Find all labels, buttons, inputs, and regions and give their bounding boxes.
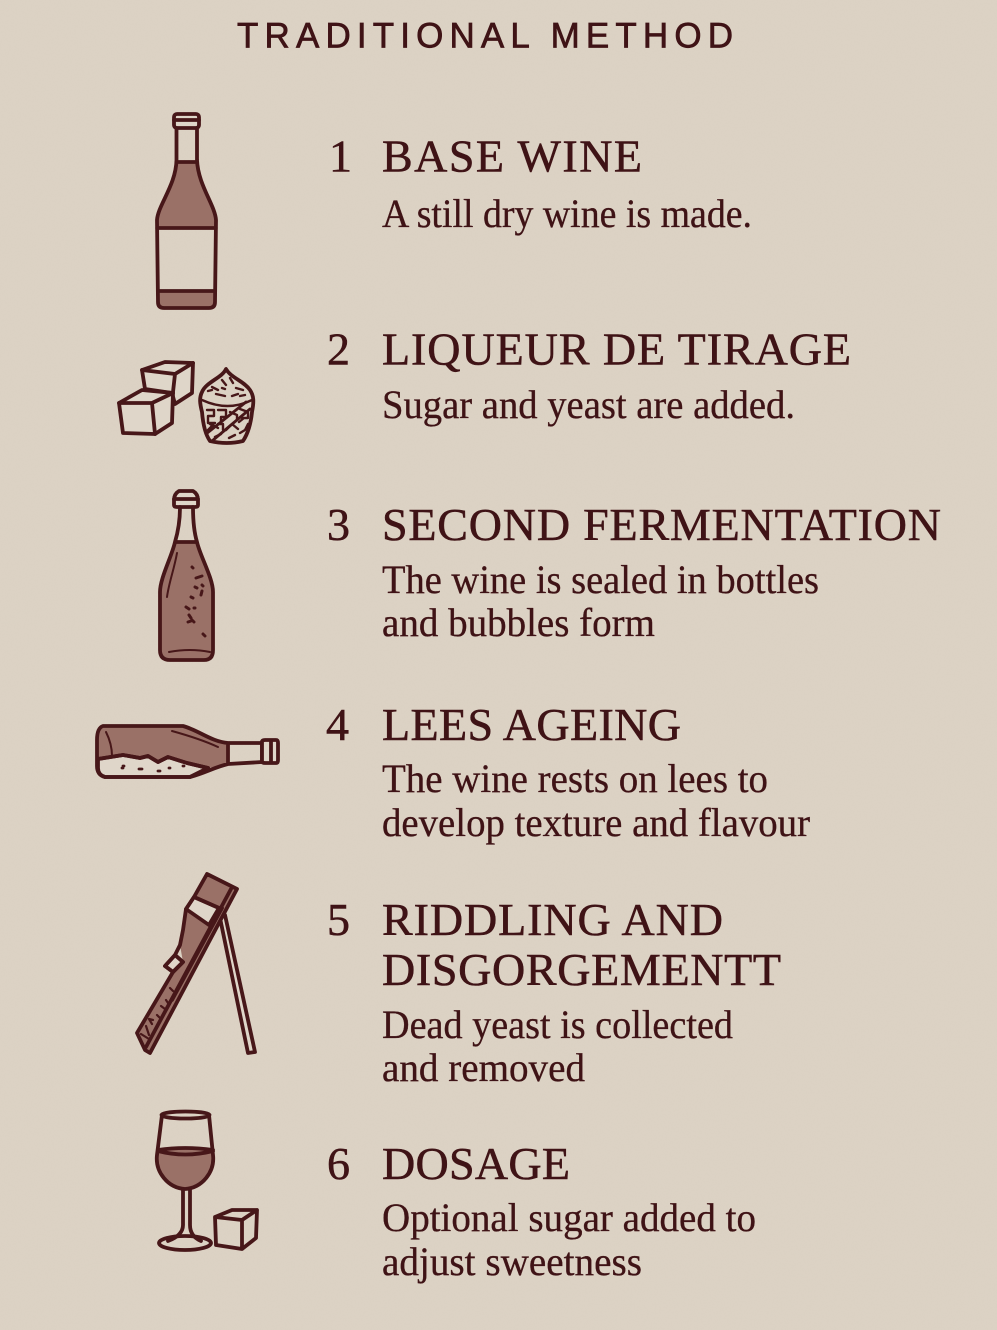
heading: liqueur de tirage: LIQUEUR DE TIRAGE [382, 324, 851, 374]
step number 1: 1 [329, 130, 352, 182]
icon: wine bottle [157, 114, 216, 308]
panel: step 6 dosage: adjust sweetness [382, 1239, 642, 1284]
panel: step 2 liqueur de tirage [119, 324, 851, 443]
panel: step 6 dosage [157, 1112, 756, 1284]
icon: wine glass and sugar cube [157, 1112, 257, 1250]
description: The wine rests on lees to [382, 756, 768, 801]
step number 6: 6 [327, 1138, 350, 1189]
description: A still dry wine is made. [382, 191, 752, 236]
panel: step 3 second fermentation: and bubbles form [382, 600, 655, 645]
heading: base wine: BASE WINE [382, 130, 642, 182]
panel: step 4 lees ageing [97, 699, 810, 845]
heading: second fermentation: SECOND FERMENTATION [382, 499, 941, 550]
icon: sugar cubes and yeast [119, 362, 253, 443]
heading: lees ageing: LEES AGEING [382, 699, 681, 750]
panel: step 3 second fermentation [160, 491, 941, 660]
panel: step 1 base wine [157, 114, 752, 308]
title: TRADITIONAL METHOD [237, 16, 733, 56]
step number 2: 2 [327, 324, 350, 374]
panel: step 5 riddling and disgorgement: DISGORGEMENTT [382, 944, 781, 995]
icon: sealed sparkling bottle [160, 491, 213, 660]
heading: riddling and disgorgement: RIDDLING AND [382, 894, 723, 945]
description: Sugar and yeast are added. [382, 382, 795, 427]
panel: step 4 lees ageing: develop texture and flavour [382, 800, 810, 845]
heading: dosage: DOSAGE [382, 1138, 570, 1189]
panel: step 5 riddling and disgorgement: and removed [382, 1045, 585, 1090]
icon: bottle on its side with lees [97, 726, 278, 777]
panel: step 5 riddling and disgorgement [137, 874, 781, 1090]
step number 4: 4 [326, 699, 349, 750]
description: The wine is sealed in bottles [382, 557, 819, 602]
icon: bottle on riddling rack [137, 874, 255, 1053]
description: Dead yeast is collected [382, 1002, 733, 1047]
step number 3: 3 [327, 499, 350, 550]
description: Optional sugar added to [382, 1195, 756, 1240]
step number 5: 5 [327, 894, 350, 945]
